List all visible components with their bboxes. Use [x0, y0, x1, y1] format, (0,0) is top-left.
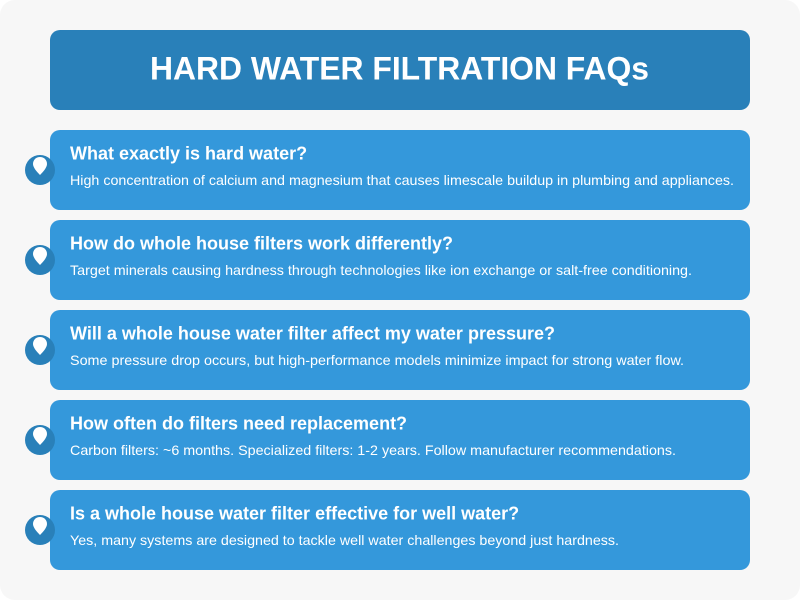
panel: what is hard water: [50, 130, 750, 210]
panel: how whole house filters work: [50, 220, 750, 300]
answer 4: Carbon filters: ~6 months. Specialized filters: 1-2 years. Follow manufacturer recommendations.: [70, 442, 676, 458]
icon: water drop 5: [25, 515, 55, 545]
icon: water drop 3: [25, 335, 55, 365]
title: HARD WATER FILTRATION FAQs: [150, 50, 649, 86]
question 2: How do whole house filters work differently?: [70, 234, 453, 254]
question 1: What exactly is hard water?: [70, 144, 307, 164]
answer 1: High concentration of calcium and magnesium that causes limescale buildup in plumbing and appliances.: [70, 172, 734, 188]
panel: replacement frequency: [50, 400, 750, 480]
question 3: Will a whole house water filter affect my water pressure?: [70, 324, 555, 344]
question 4: How often do filters need replacement?: [70, 414, 407, 434]
panel: well water: [50, 490, 750, 570]
answer 2: Target minerals causing hardness through technologies like ion exchange or salt-free conditioning.: [70, 262, 692, 278]
icon: water drop 2: [25, 245, 55, 275]
panel: water pressure: [50, 310, 750, 390]
answer 3: Some pressure drop occurs, but high-performance models minimize impact for strong water flow.: [70, 352, 684, 368]
answer 5: Yes, many systems are designed to tackle well water challenges beyond just hardness.: [70, 532, 619, 548]
icon: water drop 4: [25, 425, 55, 455]
icon: water drop 1: [25, 155, 55, 185]
title: [50, 30, 750, 110]
question 5: Is a whole house water filter effective for well water?: [70, 504, 519, 524]
